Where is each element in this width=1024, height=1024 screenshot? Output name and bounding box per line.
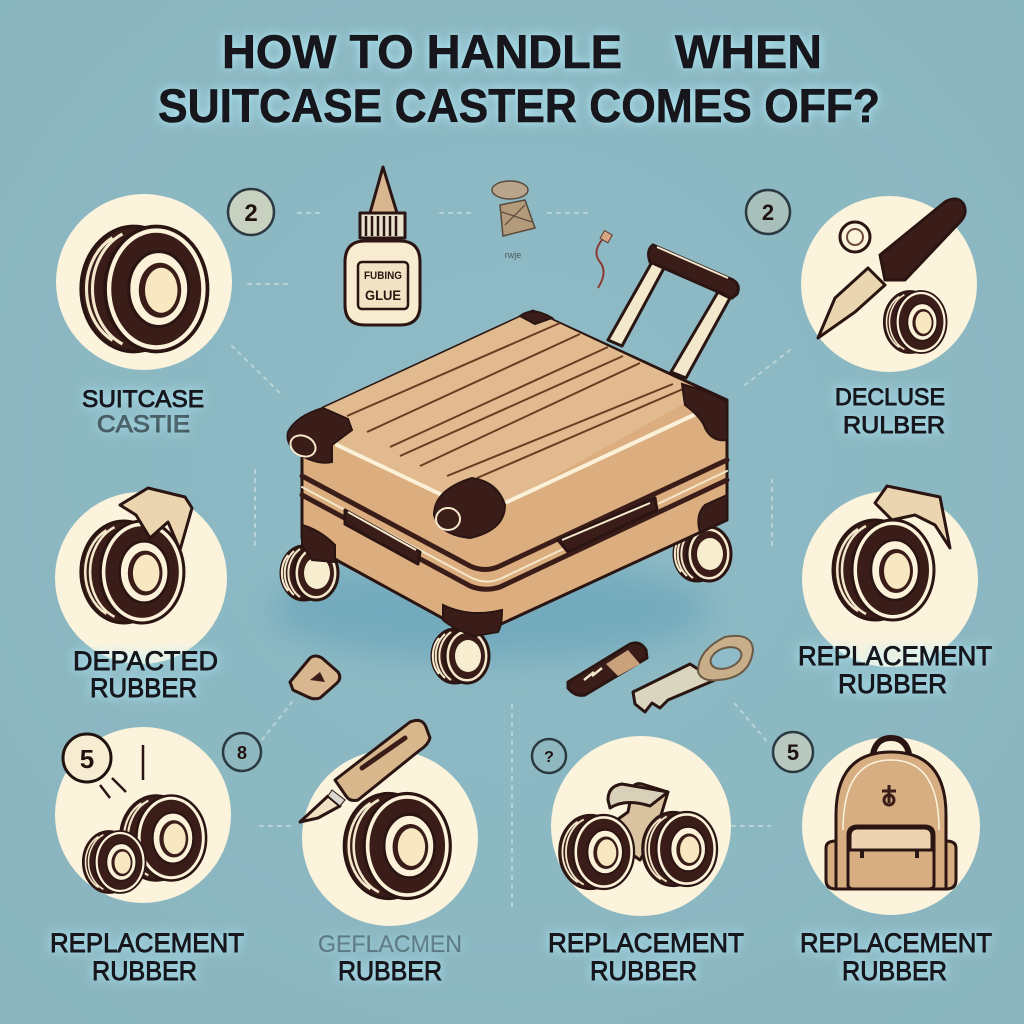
label: replacement rubber 2 xyxy=(318,931,462,986)
panel: replacement rubber 1 xyxy=(50,727,244,986)
step badge 3: ? xyxy=(544,749,554,766)
label: replacement rubber right xyxy=(798,641,992,699)
highlight edges xyxy=(337,413,698,502)
label: detach rubber: DECLUSE xyxy=(835,384,945,411)
label: replacement rubber 4: REPLACEMENT xyxy=(800,928,992,958)
wheels xyxy=(281,527,731,683)
label: replacement rubber 1: REPLACEMENT xyxy=(50,928,244,958)
top face xyxy=(323,311,705,502)
title: WHEN xyxy=(675,25,822,78)
icon: red string tag xyxy=(596,231,612,288)
icon: caster pair xyxy=(559,784,717,889)
trolley handle xyxy=(608,245,738,378)
corner caps xyxy=(288,311,727,636)
step badge 2 xyxy=(223,733,261,771)
icon: glue bottle: FUBING xyxy=(364,270,402,282)
icon: two wheels xyxy=(83,745,206,893)
icon: glue bottle: GLUE xyxy=(365,287,401,303)
label: detached rubber: DEPACTED xyxy=(73,646,218,676)
label: replacement rubber right: REPLACEMENT xyxy=(798,641,992,671)
panel: replacement rubber right xyxy=(798,486,992,699)
title: SUITCASE CASTER COMES OFF? xyxy=(158,79,880,132)
icon: wheel with bracket xyxy=(81,488,192,623)
label: replacement rubber 3: REPLACEMENT xyxy=(548,928,744,958)
small caption: rwje xyxy=(505,250,521,260)
cap rivets xyxy=(287,431,460,530)
step badge 6: 2 xyxy=(244,200,258,227)
step badge 5 xyxy=(746,190,790,234)
step badge 1 xyxy=(63,734,111,782)
floor shadow xyxy=(270,560,710,660)
label: detach rubber: RULBER xyxy=(843,412,945,439)
step badge 4 xyxy=(773,732,813,772)
icon: knife xyxy=(818,199,965,338)
left clasp xyxy=(345,510,420,564)
panel: replacement rubber 3 xyxy=(532,736,744,986)
label: replacement rubber 4 xyxy=(800,928,992,986)
step badge 6 xyxy=(228,189,274,235)
panel: replacement rubber 2 xyxy=(223,720,478,986)
icon: tag xyxy=(290,656,340,699)
rib lines xyxy=(347,323,683,478)
icon: screwdriver xyxy=(300,720,430,822)
icon: wheel with bracket xyxy=(833,486,950,620)
step badge 3 xyxy=(532,739,566,773)
panel: detached rubber xyxy=(55,488,227,703)
label: replacement rubber 3 xyxy=(548,928,744,986)
step badge 1: 5 xyxy=(80,744,94,774)
icon: wheel xyxy=(344,794,450,898)
label: replacement rubber right: RUBBER xyxy=(838,669,947,699)
label: suitcase caster: CASTIE xyxy=(97,411,190,438)
label: detached rubber xyxy=(73,646,218,703)
icon: glue tube xyxy=(568,643,647,695)
icon: backpack xyxy=(826,738,956,889)
step badge 4: 5 xyxy=(787,740,799,765)
body xyxy=(302,311,727,636)
panel: backpack xyxy=(773,732,992,986)
label: replacement rubber 1: RUBBER xyxy=(92,956,197,986)
label: detach rubber xyxy=(835,384,945,439)
icon: wheel xyxy=(81,226,208,352)
title: HOW TO HANDLE xyxy=(222,25,622,78)
icon: small wheel xyxy=(884,291,947,353)
label: replacement rubber 1 xyxy=(50,928,244,986)
icon: saw key xyxy=(633,636,753,712)
suitcase xyxy=(281,245,738,683)
icon: small ring xyxy=(840,222,870,252)
panel: detach rubber xyxy=(746,190,977,439)
label: suitcase caster xyxy=(82,386,204,438)
label: replacement rubber 4: RUBBER xyxy=(842,956,947,986)
icon: cloth bundle xyxy=(492,181,535,236)
step badge 5: 2 xyxy=(762,200,774,225)
title xyxy=(158,25,880,132)
seam xyxy=(302,460,727,589)
right clasp xyxy=(558,498,657,552)
icon: glue bottle xyxy=(345,167,420,325)
label: replacement rubber 2: GEFLACMEN xyxy=(318,931,462,958)
label: replacement rubber 3: RUBBER xyxy=(590,956,697,986)
label: suitcase caster: SUITCASE xyxy=(82,386,204,413)
label: replacement rubber 2: RUBBER xyxy=(338,956,442,986)
step badge 2: 8 xyxy=(237,743,247,763)
label: detached rubber: RUBBER xyxy=(90,673,197,703)
panel: suitcase caster xyxy=(56,194,232,438)
